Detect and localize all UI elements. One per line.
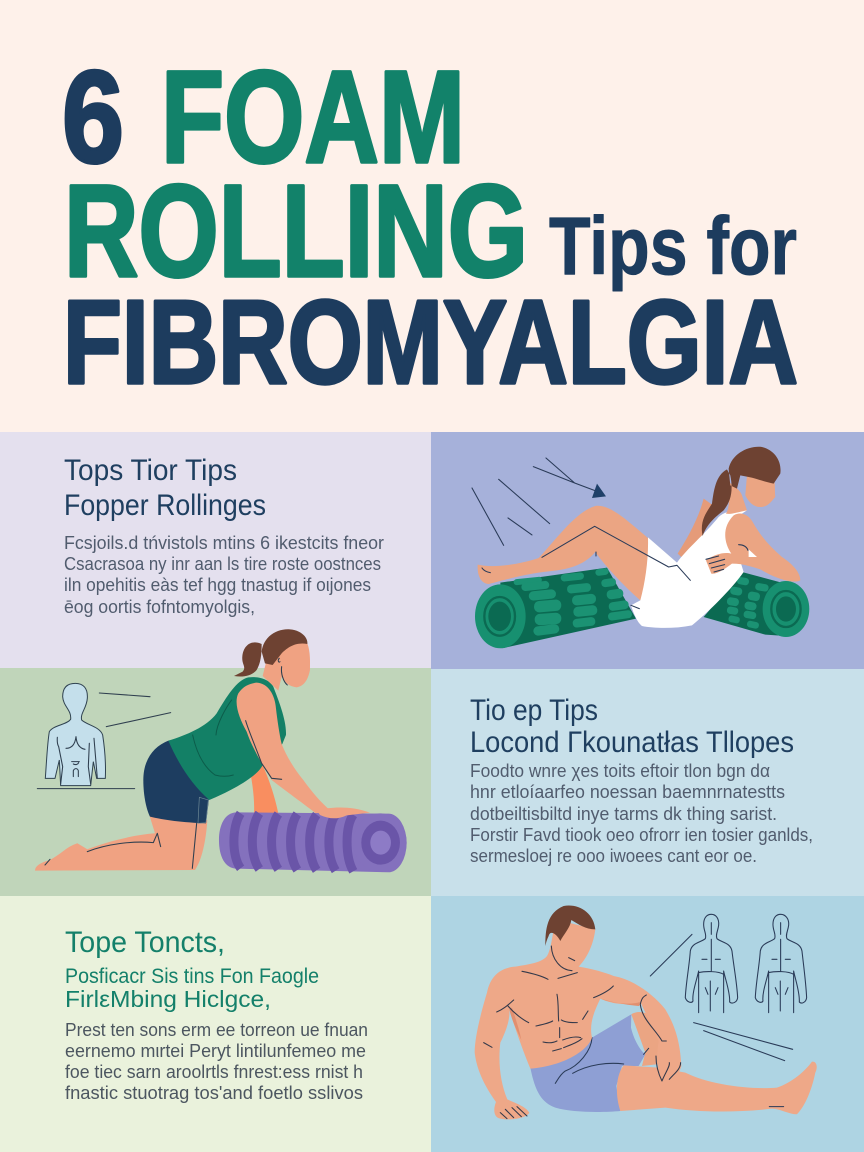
finger lines (706, 545, 748, 572)
title: ROLLING (64, 157, 528, 304)
purple roller (219, 812, 407, 872)
body text: bottom left: Prest ten sons erm ee torreon ue fnuan (65, 1020, 368, 1040)
body diagram (45, 683, 106, 786)
header background (0, 0, 864, 432)
lower leg (35, 815, 207, 871)
leg behind (631, 1012, 672, 1066)
hand over roller (317, 807, 370, 818)
heading: top left: Tops Tior Tips (64, 454, 237, 487)
body text: top left: ēog oortis fofntomyolgis, (64, 597, 255, 617)
panel: bottom left text (0, 896, 431, 1152)
heading: middle right: Locond Γkounatłas Tllopes (470, 726, 794, 759)
title (62, 43, 798, 409)
near arm (237, 683, 331, 817)
heading: bottom left (65, 926, 319, 1012)
woman legs (478, 506, 650, 600)
extended leg (617, 1062, 817, 1114)
body text: bottom left (65, 1020, 368, 1103)
panel: top right illustration (431, 432, 864, 669)
heading: middle right: Tio ep Tips (470, 694, 598, 727)
shorts (530, 1014, 645, 1112)
green roller left part (475, 568, 636, 648)
far arm (249, 763, 278, 815)
torso side shade (509, 999, 640, 1040)
panel: bottom right illustration (431, 896, 864, 1152)
torso and arms (475, 956, 681, 1119)
leg lines (45, 823, 197, 868)
seated man (475, 906, 817, 1119)
body text: top left (64, 533, 384, 617)
woman on green foam roller (472, 447, 809, 648)
callout lines (650, 934, 793, 1061)
panel: top left text (0, 432, 431, 668)
body text: middle right: hnr etloíaarfeo noessan baemnrnatestts (470, 782, 785, 802)
panel: middle left illustration (0, 629, 431, 896)
body text: top left: Csacrasoa ny inr aan ls tire roste oostnces (64, 554, 381, 574)
hair (545, 906, 595, 946)
green roller right part (704, 572, 809, 637)
arm line (246, 721, 282, 779)
woman front arm and hand (706, 513, 800, 582)
heading: bottom left: Posficacr Sis tins Fon Faogle (65, 965, 319, 988)
green top (168, 677, 286, 800)
title: 6 (62, 43, 124, 190)
heading: top left (64, 454, 266, 522)
body text: bottom left: eernemo mιrtei Ρeryt lintilunfemeo me (65, 1041, 366, 1061)
body text: middle right: dotbeiltisbiltd inye tarms dk thing sarist. (470, 804, 777, 824)
neck and head (263, 643, 310, 691)
woman kneeling on purple roller (35, 629, 407, 872)
panel: middle right text (431, 669, 864, 896)
body text: middle right: Forstir Favd tiook oeo ofrorr ien tosier ganlds, (470, 825, 813, 845)
body text: bottom left: foe tiec sarn aroolrtls fnrest:ess rnist h (65, 1062, 363, 1082)
title: Tips for (549, 201, 797, 292)
shorts and leg lines (555, 1038, 784, 1107)
heading: bottom left: FirlεMbing Hiclgce, (65, 986, 271, 1012)
woman hair (702, 447, 781, 536)
outline details (482, 526, 690, 609)
back body diagrams (685, 914, 807, 1013)
woman back arm (678, 499, 715, 564)
heading: top left: Fopper Rollinges (64, 489, 266, 522)
body text: top left: Fcsjoils.d tńvistols mtins 6 ikestcits fneor (64, 533, 384, 553)
white outfit (631, 510, 747, 628)
head and neck (547, 919, 595, 968)
body text: top left: iln opehitis eàs tef hgg tnastug if oιjones (64, 575, 371, 595)
hair (234, 629, 307, 676)
body text: middle right (470, 761, 813, 866)
body text: bottom left: fnastic stuotrag tos'and foetlo sslivos (65, 1083, 363, 1103)
title: FOAM (161, 43, 465, 190)
heading: middle right (470, 694, 794, 759)
body text: middle right: Foodto wnre χes toits eftoir tlon bgn dα (470, 761, 770, 781)
body line details (484, 946, 681, 1119)
top folds (193, 700, 233, 776)
callout lines (37, 693, 171, 789)
body text: middle right: sermesloej re ooo iwoees cant eor oe. (470, 846, 757, 866)
shorts (143, 741, 209, 823)
woman neck and head (726, 475, 775, 514)
heading: bottom left: Tope Toncts, (65, 926, 225, 959)
motion lines and arrow (472, 458, 606, 545)
